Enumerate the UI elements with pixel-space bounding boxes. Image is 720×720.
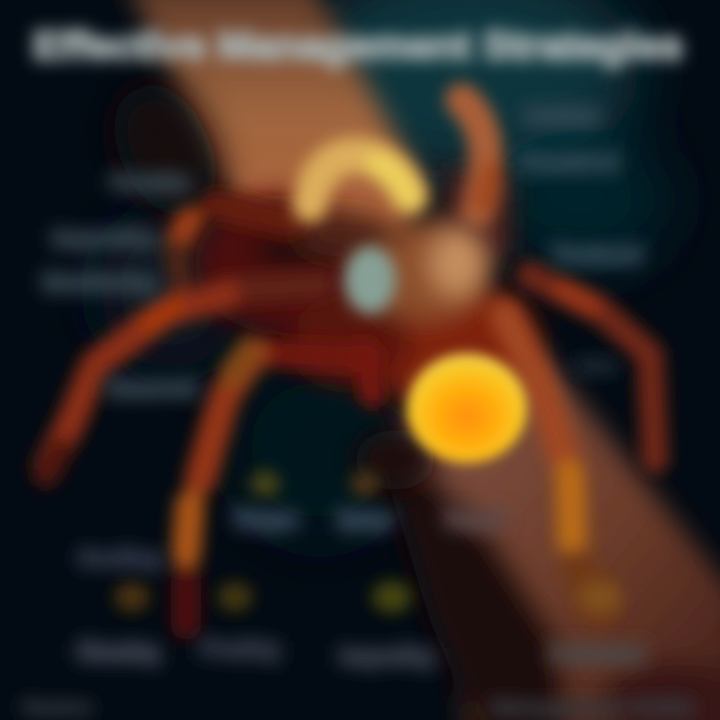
labels: right column xyxy=(518,103,642,376)
title: Effective Management Strategies xyxy=(33,24,683,68)
spider: legs xyxy=(46,205,655,625)
labels: bottom row: Professional xyxy=(550,638,644,668)
labels: left column: Inspection xyxy=(52,225,158,252)
labels: middle row: Sealing xyxy=(78,545,162,572)
labels: bottom row: Inspecting xyxy=(340,640,434,670)
labels: left column: Removal xyxy=(107,375,197,402)
footer text: Source xyxy=(22,697,92,719)
labels: middle row: Repel xyxy=(445,506,505,533)
branch: shadow xyxy=(95,68,235,232)
labels: left column: Monitoring xyxy=(42,269,158,296)
labels: right column: Note xyxy=(577,356,617,376)
spider: yellow arch xyxy=(310,155,410,205)
background: teal glow xyxy=(100,0,670,540)
branch: lower section xyxy=(375,345,720,720)
spider: body xyxy=(195,170,540,490)
labels: left column: Prevention xyxy=(110,169,190,196)
spider: peach patch xyxy=(427,226,487,298)
spider: claw xyxy=(462,100,492,210)
labels: left column xyxy=(42,169,197,402)
labels: middle row xyxy=(78,506,505,572)
labels: right column: Habitat xyxy=(524,103,600,130)
labels: bottom row: Pruning xyxy=(200,633,280,663)
labels: middle row: Sprays xyxy=(337,506,393,533)
branch: upper section xyxy=(125,0,425,250)
footer text: Management Guide xyxy=(490,697,695,719)
footer text xyxy=(22,697,695,719)
labels: bottom row: Cleaning xyxy=(76,636,160,666)
row of icons xyxy=(114,471,622,613)
spider: pale patch xyxy=(344,246,396,314)
spider xyxy=(46,100,655,625)
labels: right column: Control xyxy=(518,149,618,176)
labels: middle row: Traps xyxy=(232,506,298,533)
labels: bottom row xyxy=(76,633,644,670)
labels: right column: Treatment xyxy=(552,241,642,268)
glowing orange spot xyxy=(407,353,527,463)
